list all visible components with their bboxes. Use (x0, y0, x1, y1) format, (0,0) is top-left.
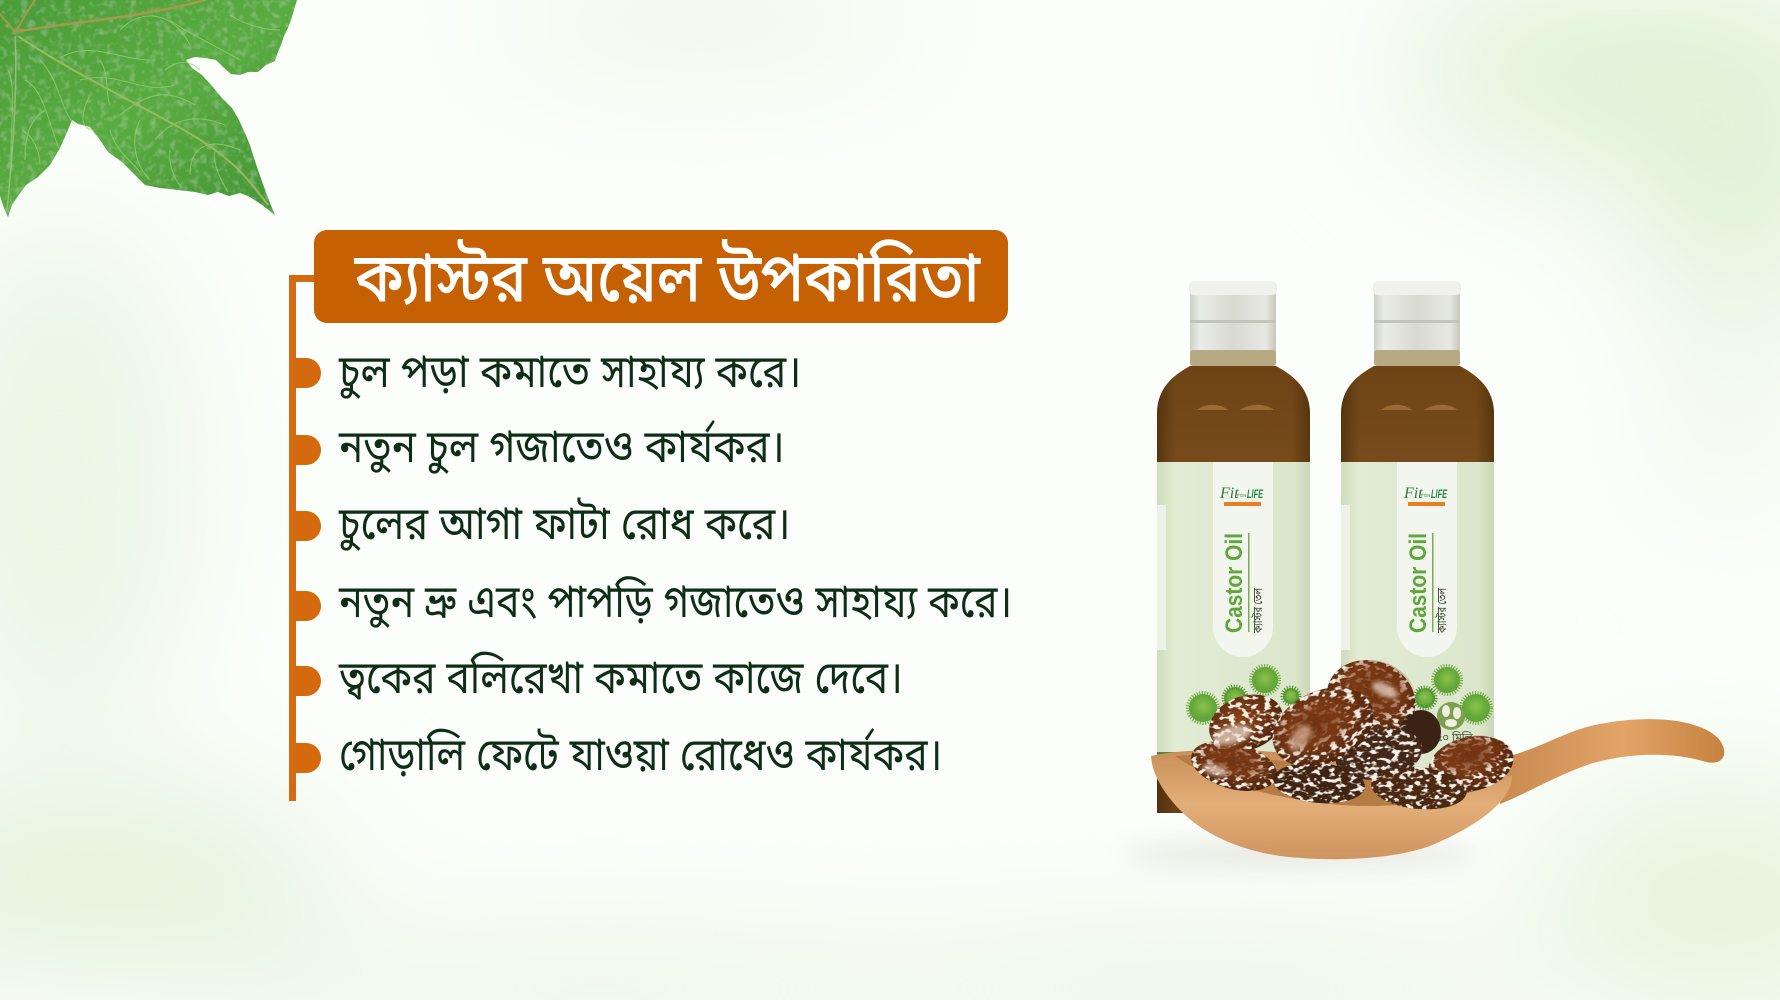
bengali product name: ক্যাস্টর তেল (1434, 588, 1449, 634)
brand logo: LIFE (1431, 487, 1448, 501)
seed highlights (1201, 679, 1400, 778)
burrs (1189, 667, 1299, 722)
seed glossy centres (1192, 649, 1511, 792)
brand logo (1403, 485, 1448, 506)
icon: castor leaf in top-left corner (0, 0, 297, 217)
benefit 6: গোড়ালি ফেটে যাওয়া রোধেও কার্যকর। (339, 728, 942, 780)
brand logo: Fit (1403, 485, 1423, 502)
brand logo: Fit (1219, 485, 1239, 502)
title banner: ক্যাস্টর অয়েল উপকারিতা (355, 240, 980, 316)
volume text: ৫০ মিলি (1436, 731, 1474, 744)
benefit 4: নতুন ভ্রু এবং পাপড়ি গজাতেও সাহায্য করে। (339, 575, 1012, 627)
seed bodies (1186, 648, 1519, 813)
benefit 3: চুলের আগা ফাটা রোধ করে। (339, 497, 791, 549)
bengali product name: ক্যাস্টর তেল (1250, 588, 1265, 634)
brand logo: FOR (1237, 493, 1247, 498)
bottle cap (1189, 281, 1277, 366)
wooden spoon (1151, 719, 1724, 859)
benefit 2: নতুন চুল গজাতেও কার্যকর। (339, 420, 785, 472)
big front seed (1260, 672, 1386, 782)
brand logo: LIFE (1247, 487, 1264, 501)
benefit 5: ত্বকের বলিরেখা কমাতে কাজে দেবে। (339, 651, 903, 703)
castor seeds (1186, 648, 1519, 813)
burrs and split pod (1415, 667, 1490, 730)
seed speckles (1186, 648, 1519, 813)
spoon shadow (1125, 842, 1475, 866)
bottle label (1157, 462, 1310, 758)
bottle: right (1125, 281, 1724, 866)
bottle label (1341, 462, 1494, 775)
timeline spine (289, 275, 296, 801)
brand logo: FOR (1421, 493, 1431, 498)
benefit 1: চুল পড়া কমাতে সাহায্য করে। (339, 345, 801, 397)
spine connector (289, 275, 315, 282)
product name: Castor Oil (1405, 533, 1432, 633)
bottle cap (1373, 281, 1461, 366)
brand logo (1219, 485, 1264, 506)
product name: Castor Oil (1221, 533, 1248, 633)
bottle: left (1125, 281, 1724, 866)
